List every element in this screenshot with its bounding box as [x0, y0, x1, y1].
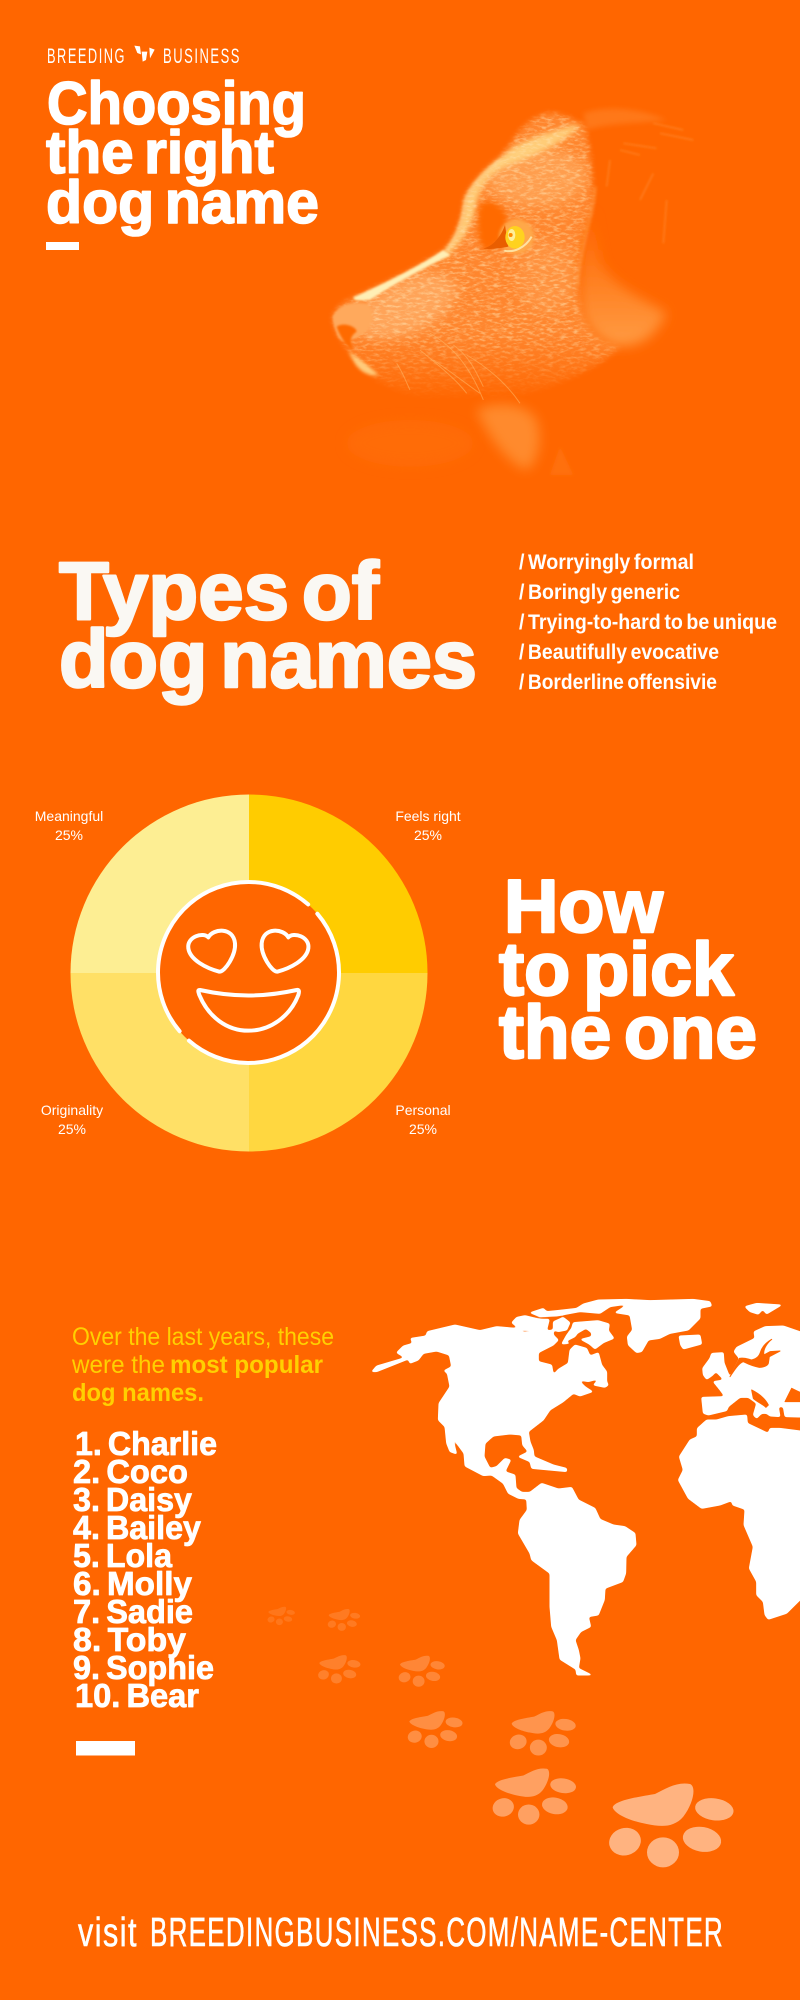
ear lower fur [580, 210, 667, 346]
continents [372, 1299, 800, 1675]
brand word right: BUSINESS [163, 45, 241, 68]
paw 4 [398, 1656, 445, 1687]
list: popular dog names: 4. Bailey [73, 1509, 202, 1546]
forehead rim [446, 159, 502, 251]
nose [333, 303, 373, 341]
greenland [530, 1299, 712, 1353]
donut chart [70, 794, 428, 1152]
list: name types: / Trying-to-hard to be unique [519, 611, 777, 634]
heading: types of dog names: Types of [59, 546, 380, 637]
africa [678, 1415, 800, 1619]
donut labels [35, 808, 461, 1137]
heading: how to pick the one: How [504, 864, 664, 948]
inland seas [730, 1339, 800, 1407]
eye glint [508, 229, 515, 241]
paw 2 [327, 1609, 360, 1631]
paw 5 [406, 1711, 463, 1748]
donut labels: Feels right [395, 808, 461, 824]
intro text: Over the last years, these [72, 1323, 334, 1351]
list: name types [519, 551, 777, 694]
chest patch [477, 404, 539, 470]
eye lower lid [504, 237, 532, 251]
heading: types of dog names [59, 546, 477, 705]
eye [505, 226, 525, 249]
list: popular dog names: 1. Charlie [75, 1425, 217, 1462]
list: popular dog names: 5. Lola [73, 1537, 173, 1574]
top hair [583, 109, 667, 130]
donut labels: 25% [55, 827, 83, 843]
brand word left: BREEDING [47, 45, 126, 68]
intro text: most popular [170, 1351, 323, 1379]
donut labels: 25% [409, 1121, 437, 1137]
baltic sea [730, 1339, 780, 1377]
paw 6 [508, 1711, 577, 1756]
donut labels: 25% [58, 1121, 86, 1137]
british isles [703, 1353, 729, 1379]
americas [372, 1325, 636, 1675]
list: popular dog names: 6. Molly [73, 1565, 193, 1602]
icon: smiling face with heart eyes [121, 845, 376, 1100]
donut labels: 25% [414, 827, 442, 843]
heading: how to pick the one [499, 864, 757, 1074]
arctic island west [512, 1316, 549, 1332]
list: name types: / Beautifully evocative [519, 641, 719, 664]
nostril and mouth shadow [337, 325, 357, 350]
face outline [121, 845, 376, 1100]
list: popular dog names: 9. Sophie [73, 1649, 214, 1686]
brand logo [47, 45, 241, 68]
intro text: were the [71, 1351, 165, 1379]
chest sliver [550, 447, 573, 475]
list: popular dog names: 2. Coco [73, 1453, 188, 1490]
eyes and mouth [188, 931, 308, 1031]
illustration: dog profile [320, 100, 693, 475]
paw 8 [606, 1784, 735, 1867]
paw 7 [491, 1768, 577, 1825]
baffin island [562, 1321, 614, 1349]
eye shadow [483, 225, 508, 249]
list: popular dog names [73, 1425, 217, 1714]
donut labels: Personal [395, 1102, 451, 1118]
segment: meaningful [70, 794, 249, 973]
svalbard [745, 1303, 782, 1314]
paw prints trail [267, 1607, 735, 1867]
eye rim [499, 219, 534, 254]
donut labels: Meaningful [35, 808, 103, 824]
arctic island middle [553, 1317, 570, 1332]
list: name types: / Borderline offensivie [519, 671, 717, 694]
list: popular dog names: 8. Toby [73, 1621, 187, 1658]
europe [702, 1326, 800, 1418]
adriatic sea [752, 1390, 768, 1407]
ear rim [577, 187, 595, 287]
icon: dog face [134, 46, 155, 62]
lower body glow [347, 420, 473, 467]
title [46, 70, 319, 236]
heading: how to pick the one: the one [499, 990, 757, 1074]
whiskers [397, 333, 520, 403]
eye socket shadow [478, 202, 507, 250]
lower lip highlight [348, 352, 378, 375]
segment: personal [249, 973, 428, 1152]
title: the right [46, 119, 274, 186]
list: popular dog names: 7. Sadie [73, 1593, 193, 1630]
world map [372, 1299, 800, 1675]
donut hole [158, 882, 339, 1063]
black sea [785, 1388, 800, 1402]
segment: feels right [249, 794, 428, 973]
heading: types of dog names: dog names [59, 614, 477, 705]
list: popular dog names: 3. Daisy [73, 1481, 193, 1518]
segment: originality [70, 973, 249, 1152]
list accent bar [76, 1741, 135, 1756]
heading: how to pick the one: to pick [499, 927, 734, 1011]
ear tuft [607, 123, 693, 243]
list: name types: / Boringly generic [519, 581, 680, 604]
paw 3 [317, 1655, 361, 1684]
donut labels: Originality [41, 1102, 103, 1118]
iceland [679, 1335, 702, 1349]
pupil [509, 233, 513, 237]
intro text: dog names. [72, 1379, 204, 1407]
list: popular dog names: 10. Bear [75, 1677, 199, 1714]
title: Choosing [47, 70, 306, 137]
paw 1 [267, 1607, 295, 1625]
snout highlight [353, 250, 451, 300]
intro text [71, 1323, 334, 1407]
list: name types: / Worryingly formal [519, 551, 694, 574]
title: dog name [46, 169, 319, 236]
dog head shading [330, 110, 620, 394]
footer url: visit [78, 1909, 138, 1955]
title accent bar [46, 242, 79, 250]
